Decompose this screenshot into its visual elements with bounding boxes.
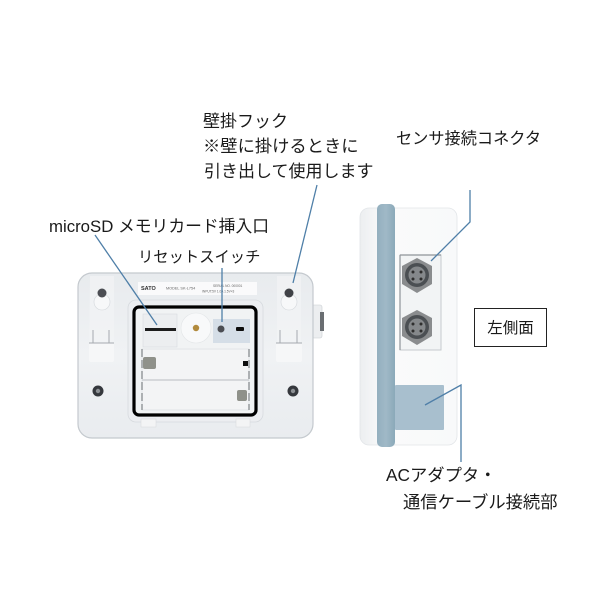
model label [138, 282, 257, 295]
label: wall hook: 引き出して使用します [204, 161, 374, 181]
reset switch panel [213, 319, 250, 343]
label: wall hook: ※壁に掛けるときに [203, 136, 359, 156]
label: AC adapter line: ACアダプタ・ [386, 465, 496, 485]
back case [78, 273, 313, 438]
label: AC adapter line [386, 465, 558, 512]
grey-blue band [377, 204, 395, 447]
label: AC adapter line: 通信ケーブル接続部 [403, 492, 558, 512]
connector plate [400, 255, 441, 350]
sensor connector bottom [402, 310, 432, 345]
leader line: sensor connector [431, 190, 470, 261]
side connector stub [312, 305, 324, 338]
label: reset switch: リセットスイッチ [138, 249, 260, 266]
model label: SERIAL NO. 000001 [213, 284, 243, 288]
AC adapter cover [395, 385, 444, 430]
device left side view [360, 204, 457, 447]
leader line: microSD [95, 235, 157, 325]
battery compartment with black gasket [134, 307, 256, 415]
leader line: wall hook [293, 185, 317, 283]
label: microSD slot: microSD メモリカード挿入口 [49, 217, 269, 236]
label: sensor connector: センサ接続コネクタ [396, 130, 541, 148]
model label: MODEL SK-L754 [166, 286, 195, 290]
leader line: reset switch [221, 268, 223, 322]
case feet tabs [141, 419, 250, 427]
label: wall hook: 壁掛フック [203, 112, 288, 131]
left wall hook [89, 276, 114, 362]
battery bays [142, 349, 249, 410]
centre boss [181, 313, 211, 343]
side case [360, 208, 457, 445]
device back view [78, 273, 324, 438]
microSD slot panel [143, 314, 177, 347]
label: wall hook [203, 112, 374, 181]
inner recess [128, 300, 263, 422]
label box: left side [474, 308, 546, 346]
model label: INPUT:5V 1.0A 1.5V×3 [202, 290, 235, 294]
leader line: AC adapter [425, 385, 461, 462]
case screws [92, 386, 298, 396]
model label: SATO [141, 286, 156, 292]
label box: left side: 左側面 [487, 319, 534, 337]
sensor connector top [402, 258, 432, 293]
right wall hook [276, 276, 302, 362]
